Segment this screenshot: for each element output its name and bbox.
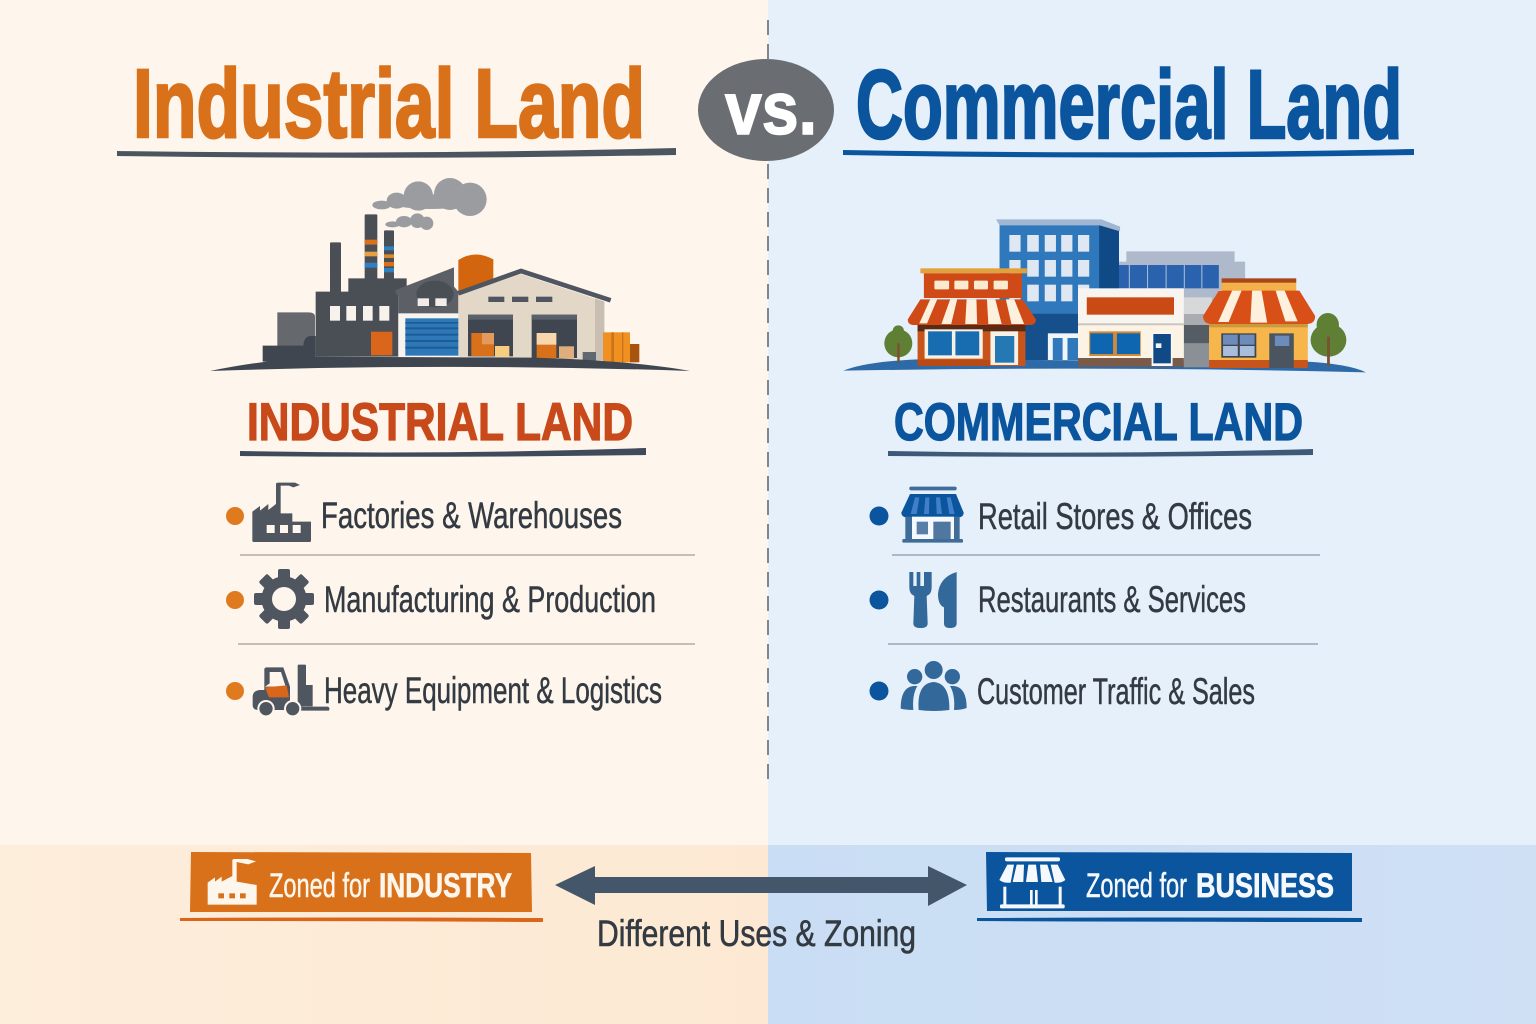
middle building: [396, 267, 458, 314]
heading: COMMERCIAL LAND: COMMERCIAL LAND: [894, 393, 1303, 452]
list item: retail stores and offices: Retail Stores & Offices: [978, 496, 1252, 537]
right shop: [1203, 278, 1315, 368]
banner: zoned for business: [977, 852, 1362, 922]
icon: white factory: [208, 859, 257, 905]
back gray building: [1112, 251, 1245, 367]
panel: commercial background: [768, 0, 1536, 845]
list item: factories and warehouses: Factories & Warehouses: [321, 495, 622, 536]
banner: zoned for industry: INDUSTRY: [379, 867, 512, 905]
list item: customer traffic and sales: Customer Traffic & Sales: [977, 671, 1255, 712]
arrow: double headed: [555, 866, 967, 906]
cargo boxes: [471, 332, 639, 362]
vs badge: vs.: [725, 67, 817, 150]
warehouse bay doors: [468, 315, 577, 358]
chimneys and main factory: [316, 214, 407, 357]
list item: customer traffic and sales: [870, 661, 1255, 712]
striped awning left: [908, 299, 1036, 325]
icon: fork and knife: [909, 572, 957, 628]
banner: zoned for industry: Zoned for: [269, 867, 370, 905]
panel: bottom band commercial: [768, 845, 1536, 1024]
warehouse: [458, 274, 604, 361]
icon: factory: [252, 483, 311, 542]
list item: factories and warehouses: [226, 483, 622, 542]
icon: people group: [901, 661, 967, 711]
icon: gear: [254, 569, 314, 629]
center store: [1078, 288, 1184, 367]
striped awning right: [1203, 291, 1315, 324]
illustration: commercial street: [843, 219, 1366, 372]
vs badge: [698, 59, 834, 161]
panel: industrial background: [0, 0, 768, 845]
icon: forklift: [253, 665, 329, 717]
right tree: [1311, 313, 1346, 366]
icon: store: [901, 487, 964, 543]
list item: manufacturing and production: Manufacturing & Production: [324, 579, 656, 620]
list item: heavy equipment and logistics: [226, 665, 662, 717]
left back block: [277, 312, 315, 347]
storage tank: [458, 254, 493, 295]
blue roller door: [405, 318, 459, 356]
list item: restaurants and services: Restaurants & Services: [978, 579, 1246, 620]
banner: zoned for industry: [180, 852, 543, 922]
panel: bottom band industrial: [0, 845, 768, 1024]
banner: zoned for business: Zoned for: [1086, 867, 1187, 905]
ground: [210, 357, 690, 371]
list item: heavy equipment and logistics: Heavy Equipment & Logistics: [324, 670, 662, 711]
illustration: factory and warehouse: [210, 178, 690, 371]
list item: manufacturing and production: [226, 569, 656, 629]
left tree: [884, 325, 912, 363]
heading: INDUSTRIAL LAND: INDUSTRIAL LAND: [247, 393, 633, 452]
list item: retail stores and offices: [870, 487, 1252, 543]
icon: white storefront: [999, 857, 1065, 908]
left shop: [908, 268, 1036, 366]
ground: [843, 359, 1366, 372]
office tower: [996, 219, 1120, 360]
list item: restaurants and services: [870, 572, 1246, 628]
caption: different uses and zoning: Different Uses & Zoning: [597, 913, 916, 954]
title: Industrial Land: Industrial Land: [133, 49, 645, 158]
smoke clouds: [372, 178, 487, 230]
banner: zoned for business: BUSINESS: [1196, 867, 1334, 905]
